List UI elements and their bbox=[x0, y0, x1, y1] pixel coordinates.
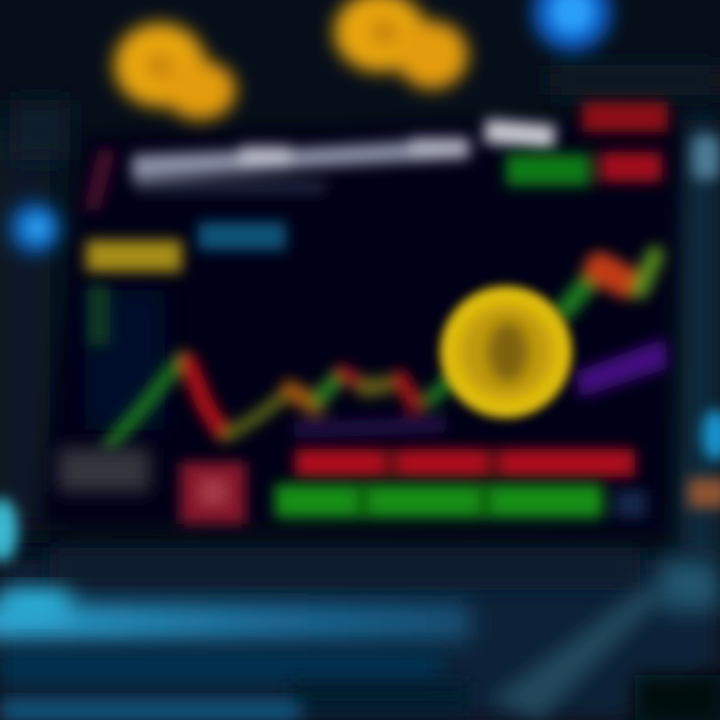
red bar row bbox=[295, 449, 635, 477]
large gold coin bbox=[440, 286, 572, 418]
grey stat block bbox=[58, 448, 150, 492]
blue label bbox=[198, 222, 286, 250]
laptop screen bbox=[40, 115, 680, 535]
icon: cyan glow left edge bbox=[0, 498, 18, 562]
green bar row bbox=[275, 484, 647, 518]
title text block bbox=[132, 119, 556, 192]
faint green axis bbox=[88, 285, 110, 345]
red stat block bbox=[180, 462, 246, 524]
line chart: green and red candles bbox=[110, 255, 655, 445]
icon: blue glow left bbox=[9, 202, 61, 254]
keyboard deck bbox=[0, 548, 720, 720]
accent stripe beside title bbox=[84, 150, 116, 210]
icon: gold coin top centre bbox=[334, 0, 468, 89]
icon: gold coin top left bbox=[114, 23, 236, 120]
icon: orange tag right edge bbox=[688, 478, 720, 508]
icon: cyan glow right edge bbox=[702, 409, 720, 461]
icon: blue glow top bbox=[532, 0, 612, 52]
yellow label bbox=[86, 240, 182, 272]
purple slanted bar bbox=[575, 338, 668, 398]
red and green badges top right bbox=[506, 102, 668, 186]
icon: pale blue glow right bbox=[692, 135, 720, 180]
